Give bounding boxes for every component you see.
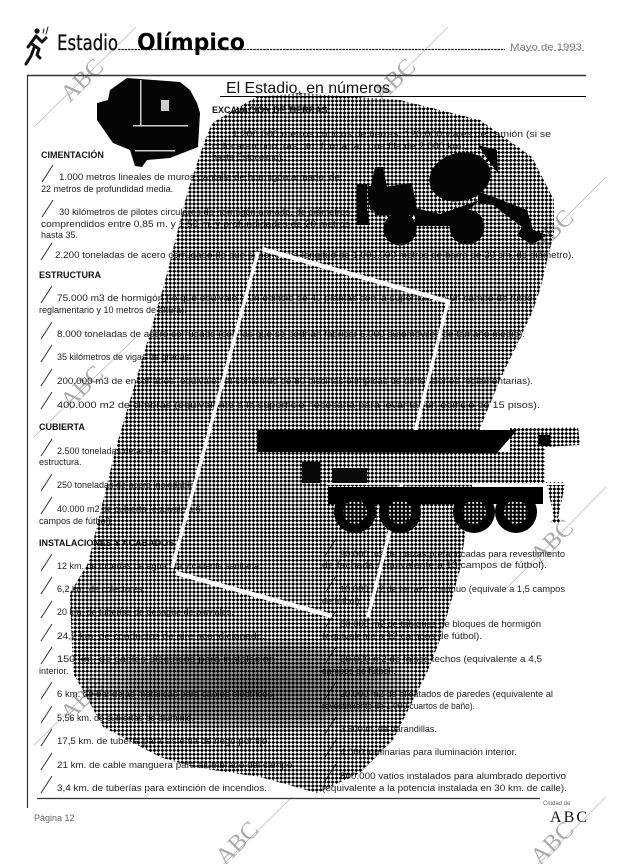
text block: instalaciones, right column: 90.000 m2 de piezas prefabricadas para revestimiento (340, 549, 565, 559)
icon: compactor machine (97, 78, 200, 167)
icon: running athlete (26, 27, 48, 64)
text block: estructura: 200.000 m3 de encofrados (equivalen al contenido de 80 piscinas olímpicas de dimensiones reglamentarias). (57, 376, 533, 386)
text block: estructura: 75.000 m3 de hormigón (lo que equivale a un edificio de 40 plantas con la superficie de un campo de fútbol (57, 293, 535, 303)
text block: instalaciones, right column: 800.000 vatios instalados para alumbrado deportivo (340, 771, 566, 781)
panel: halftone stadium aerial photo (70, 93, 554, 793)
title: Olímpico (137, 30, 245, 56)
footer: page number: Página 12 (34, 813, 75, 823)
text block: cimentación: hasta 35. (41, 230, 78, 240)
text block: instalaciones, right column: 80.000 m2 de tabiques de bloques de hormigón (340, 619, 541, 629)
watermark: ABC stamps: ABC (56, 673, 109, 726)
text block: cimentación: comprendidos entre 0,85 m. y 1,50 m. y profundidades de 20 metros (41, 219, 351, 229)
text block: instalaciones, right column: (equivalente a 12 campos de fútbol). (322, 631, 482, 641)
text block: instalaciones, right column (322, 549, 567, 793)
text block: instalaciones, left column: 3,4 km. de tuberías para extinción de incendios. (57, 783, 267, 793)
text block: instalaciones, left column: 24,2 km. de conductos de aire acondicionado. (57, 631, 265, 641)
watermark: ABC stamps: ABC (368, 54, 421, 107)
watermark: ABC stamps: ABC (56, 361, 109, 414)
header rule and date: Mayo de 1993 (510, 42, 582, 52)
text block: cimentación: 2.200 toneladas de acero corrugado (lo que supone una longitud de 1.000.000 metros de barra de 30 cm. de diámetro). (55, 250, 574, 260)
text block: cimentación: 1.000 metros lineales de muros pantalla de hormigón armado, de (59, 172, 340, 182)
text block: excavación: colocaran uno tras otro formarían una fila de 2.000 km., (212, 141, 467, 151)
text block: excavación: EXCAVACIÓN DE TIERRAS (212, 104, 328, 115)
text block: instalaciones, left column: 150 km. de cables eléctricos para instalación (57, 654, 275, 664)
text block: instalaciones, left column: INSTALACIONES Y ACABADOS (39, 538, 174, 548)
icon: mobile crane truck (257, 427, 580, 533)
text block: instalaciones, left column: 20 km. de tuberías de desagüe de pluviales. (57, 607, 234, 617)
text block: instalaciones, right column: (equivalente a la potencia instalada en 30 km. de calle). (322, 783, 567, 793)
title (57, 30, 245, 56)
text block: instalaciones, left column: 12 km. de tuberías de agua fría y caliente sanitaria. (57, 561, 262, 571)
text block: instalaciones, left column: interior. (39, 666, 69, 676)
text block: cubierta (39, 422, 201, 526)
text block: cubierta: 2.500 toneladas de acero en (57, 446, 171, 456)
page frame (27, 75, 586, 808)
text block: cimentación: 30 kilómetros de pilotes circulares de hormigón armado, de diámetros (59, 207, 351, 217)
text block: excavación (212, 104, 551, 162)
text block: instalaciones, right column: revestimiento de 1.000 cuartos de baño). (322, 701, 475, 711)
text block: cimentación (41, 149, 574, 260)
text block: instalaciones, left column: 21 km. de cable manguera para alumbrado del campo. (57, 760, 295, 770)
text block: instalaciones, right column: 20.000 m2 de alicatados de paredes (equivalente al (340, 689, 553, 699)
list slash markers (41, 165, 336, 793)
text block: estructura: reglamentario y 10 metros de altura). (39, 305, 187, 315)
text block: instalaciones, left column: 6 km. de bandejas metálicas para cables eléctricos. (57, 689, 275, 699)
text block: instalaciones, right column: 3.500 m. de barandillas. (340, 724, 437, 734)
text block: excavación: 1.200.000 metros cúbicos de tierras, 120.000 viajes de camión (si se (232, 129, 551, 139)
text block: excavación: hasta Estocolmo). (212, 152, 284, 162)
heading: El Estadio, en números: El Estadio, en números (226, 80, 390, 97)
text block: cubierta: 40.000 m2 de cubierta (equivale a 6 (57, 504, 201, 514)
icon: concrete mixer truck (357, 145, 547, 246)
title: Estadio (57, 31, 118, 55)
text block: estructura: 35 kilómetros de vigas de gradas. (57, 352, 192, 362)
text block: instalaciones, left column: 17,5 km. de tubería para sistema de riego por fijo. (57, 736, 270, 746)
text block: cimentación: CIMENTACIÓN (41, 149, 104, 160)
watermark: ABC stamps: ABC (526, 515, 579, 568)
text block: instalaciones, right column: 30.000 m2 de falsos techos (equivalente a 4,5 (340, 654, 542, 664)
text block: estructura: 400.000 m2 de cimbras (equivalente a la superficie necesaria para levantar un edificio de 15 pisos). (57, 400, 540, 410)
text block: instalaciones, right column: 10.000 m2 de terrazo continuo (equivale a 1,5 campos (340, 584, 566, 594)
text block: estructura (39, 270, 540, 410)
text block: instalaciones, left column (39, 538, 295, 793)
footer: source credit ABC: ABC (550, 809, 587, 826)
text block: cubierta: estructura. (39, 457, 82, 467)
text block: cubierta: campos de fútbol). (39, 516, 113, 526)
footer: source credit ABC (543, 801, 587, 826)
text block: instalaciones, left column: 5,56 km. de cubiertas de aluminio. (57, 713, 194, 723)
text block: estructura: ESTRUCTURA (39, 270, 101, 280)
text block: cubierta: CUBIERTA (39, 422, 85, 432)
field outline (172, 249, 450, 617)
watermark: ABC stamps: ABC (56, 54, 109, 107)
text block: instalaciones, right column: 4.000 luminarias para iluminación interior. (340, 747, 517, 757)
text block: cubierta: 250 toneladas de acero inoxidable. (57, 480, 197, 490)
text block: instalaciones, right column: campos de fútbol). (322, 666, 396, 676)
watermark: ABC stamps: ABC (526, 205, 579, 258)
text block: instalaciones, right column: de fachada (equivalente a 13 campos de fútbol). (322, 560, 547, 570)
text block: instalaciones, left column: 6,2 km. de colectores. (57, 584, 145, 594)
text block: instalaciones, right column: de fútbol). (322, 596, 362, 606)
text block: estructura: 8.000 toneladas de acero corrugado (con las que se podrían fabricar 6.000 automóviles de tamaño medio). (57, 329, 525, 339)
footer: source credit ABC: Ciudad de (543, 801, 571, 807)
halftone dark band (90, 635, 420, 735)
text block: cimentación: 22 metros de profundidad media. (41, 184, 173, 194)
